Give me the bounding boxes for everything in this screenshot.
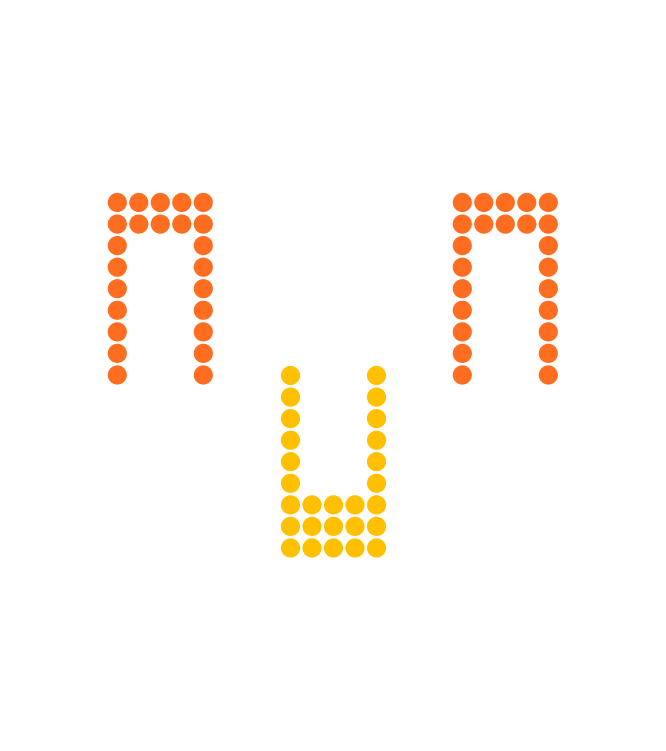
right orange dot arch (453, 193, 558, 385)
center yellow dot U shape (281, 366, 386, 558)
left orange dot arch (108, 193, 213, 385)
